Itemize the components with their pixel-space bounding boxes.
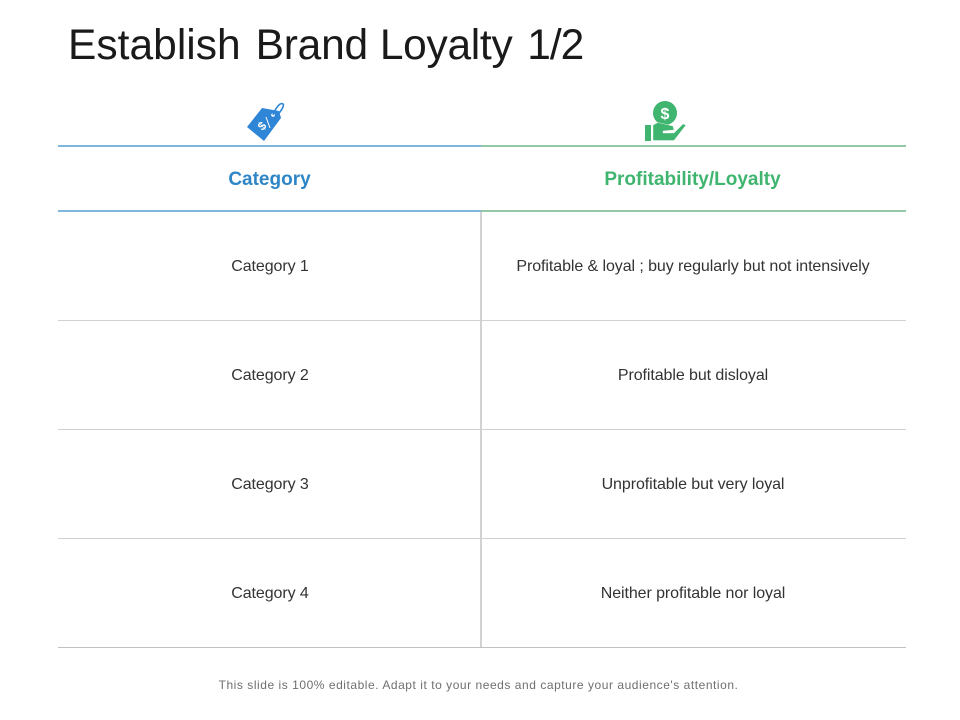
icon: price tag: $: [255, 118, 270, 133]
row 4: category: Category 4: [231, 585, 309, 602]
row 2: category: Category 2: [231, 367, 309, 384]
row 3: description: Unprofitable but very loyal: [602, 476, 784, 493]
column divider: [480, 212, 482, 648]
icon: hand holding dollar coin: $: [661, 106, 670, 123]
column heading: profitability/loyalty: Profitability/Loyalty: [604, 168, 781, 190]
row 1: category: Category 1: [231, 258, 309, 275]
icon: hand holding dollar coin: [645, 101, 686, 141]
header bottom rule: category: [58, 210, 481, 212]
row 2: description: Profitable but disloyal: [618, 367, 768, 384]
row 3: category: Category 3: [231, 476, 309, 493]
row 4: description: Neither profitable nor loyal: [601, 585, 785, 602]
footer note: This slide is 100% editable. Adapt it to your needs and capture your audience's attention.: [219, 678, 738, 692]
title: Establish Brand Loyalty 1/2: [68, 22, 583, 69]
row 1: description: Profitable & loyal ; buy regularly but not intensively: [516, 258, 870, 275]
table header rule: profitability: [481, 145, 906, 147]
table header rule: category: [58, 145, 481, 147]
header bottom rule: profitability: [481, 210, 906, 212]
icon: price tag: [247, 102, 284, 141]
column heading: category: Category: [228, 168, 311, 190]
